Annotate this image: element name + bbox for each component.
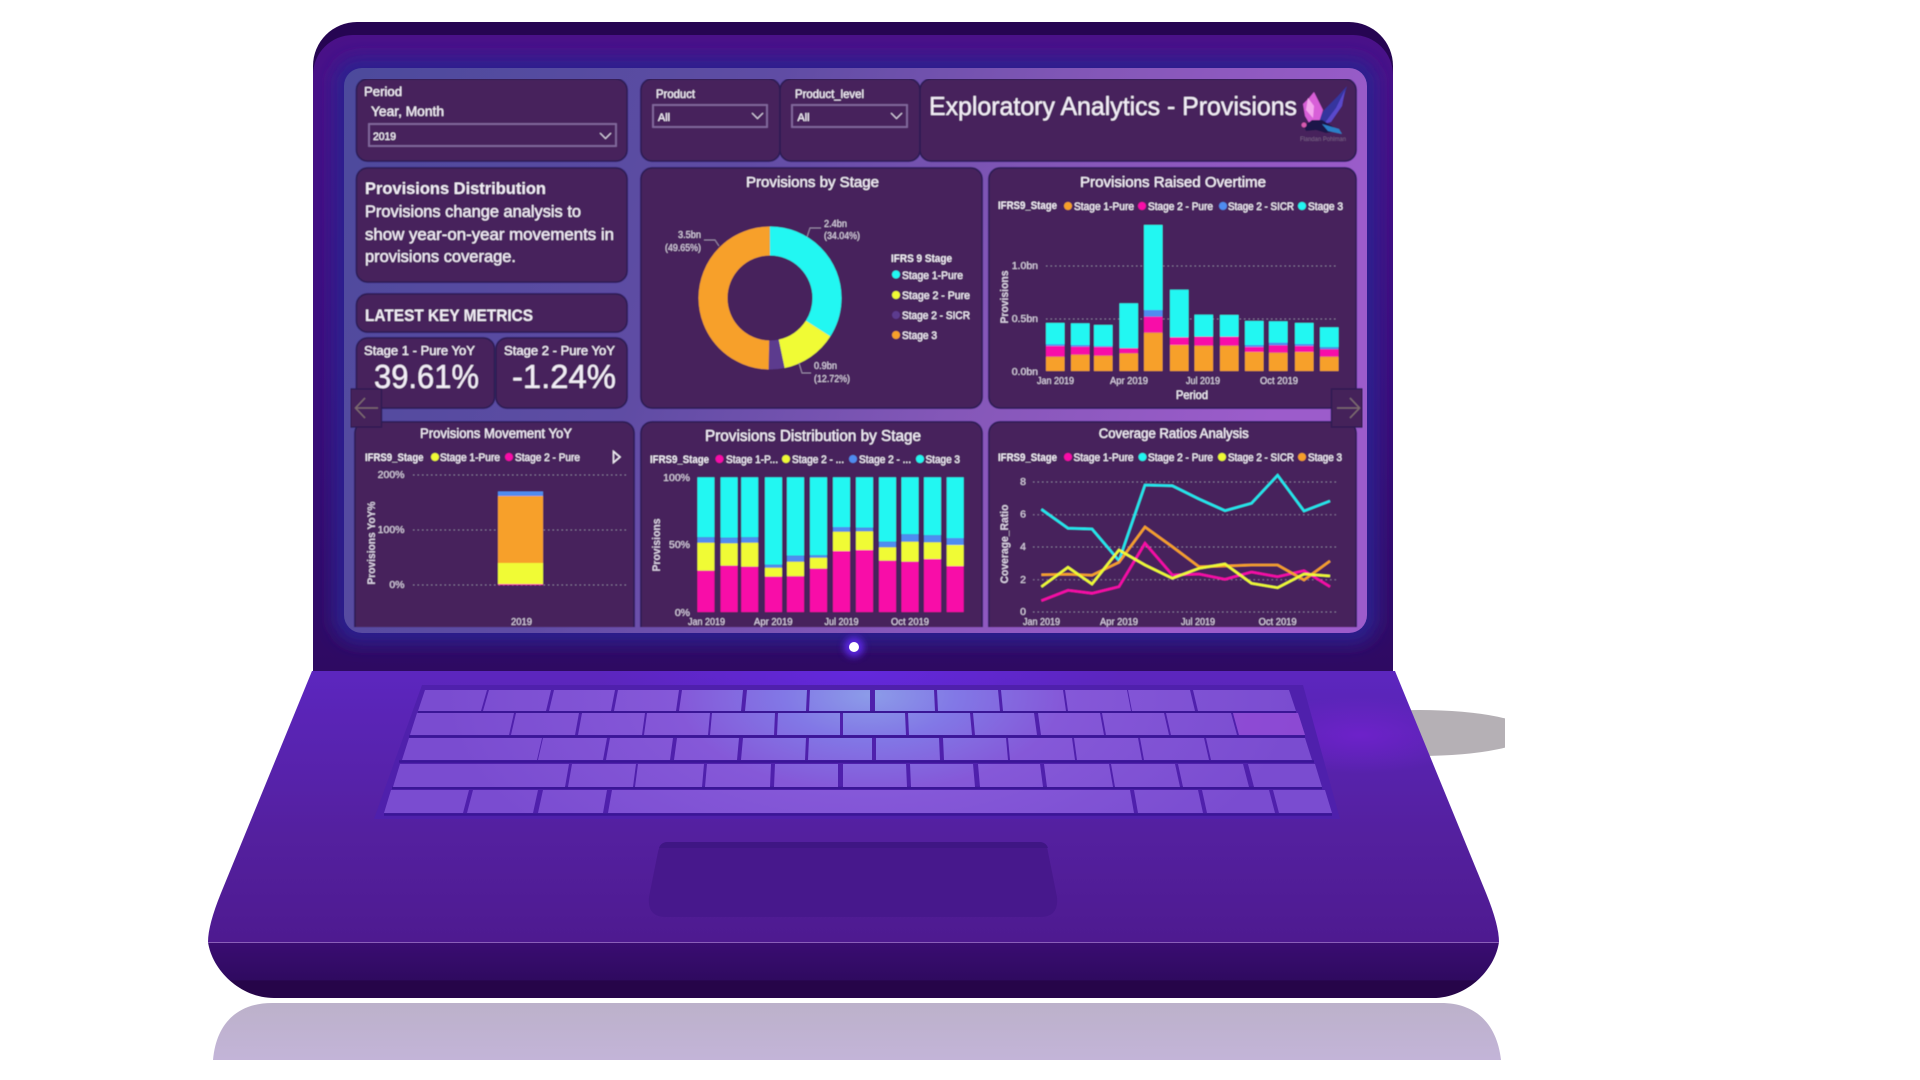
stacked bar chart: Period <box>1176 388 1208 402</box>
laptop base <box>208 671 1499 998</box>
laptop lid <box>313 22 1393 672</box>
panel: provisions by stage donut <box>641 168 982 408</box>
legend: Stage 3 <box>1308 201 1343 213</box>
table shadow behind laptop <box>1411 710 1505 756</box>
legend: Stage 1-Pure <box>440 452 500 464</box>
legend: IFRS9_Stage <box>998 452 1057 464</box>
panel: product level slicer: Product_level <box>795 87 864 101</box>
power button light <box>844 637 864 657</box>
donut legend: Stage 3 <box>902 330 937 342</box>
legend: Stage 2 - SICR <box>1228 452 1294 464</box>
dashboard screen <box>350 79 1362 652</box>
base deck <box>208 671 1499 942</box>
legend: Stage 1-Pure <box>1074 452 1134 464</box>
panel: stage 2 metric card <box>496 338 627 408</box>
stacked bar chart: Oct 2019 <box>1260 375 1298 387</box>
legend: Stage 3 <box>1308 452 1342 464</box>
stacked bar chart: 2019 <box>511 616 532 628</box>
stacked bar chart: 0.5bn <box>1012 313 1038 325</box>
donut legend: IFRS 9 Stage <box>891 253 952 265</box>
legend <box>650 454 960 466</box>
100% stacked bar chart: Jan 2019 <box>688 616 725 628</box>
line chart: 8 <box>1020 476 1026 488</box>
panel: product slicer <box>641 79 780 161</box>
panel: dashboard title <box>920 79 1356 161</box>
stacked bar chart <box>366 469 627 628</box>
line chart: 0 <box>1020 606 1026 618</box>
panel: period slicer: Year, Month <box>371 103 444 119</box>
donut data labels: (49.65%) <box>665 242 701 254</box>
100% stacked bar chart: 100% <box>663 472 690 484</box>
stacked bar chart: 100% <box>378 524 404 536</box>
panel: coverage ratios analysis: Coverage Ratios Analysis <box>1099 426 1249 441</box>
stacked bar chart: 0% <box>389 579 404 591</box>
panel: product slicer: All <box>658 112 670 124</box>
panel: provisions raised overtime <box>989 168 1356 408</box>
panel: provisions by stage donut: Provisions by Stage <box>746 174 879 191</box>
legend: Stage 2 - Pure <box>1148 452 1213 464</box>
legend: Stage 2 - Pure <box>515 452 580 464</box>
donut data labels: (12.72%) <box>814 373 850 385</box>
panel: provisions raised overtime: Provisions Raised Overtime <box>1080 174 1266 191</box>
stacked bar chart: Provisions <box>999 270 1011 324</box>
key rows <box>384 690 1332 813</box>
line chart: 6 <box>1020 508 1026 520</box>
donut legend: Stage 1-Pure <box>902 270 963 282</box>
icon: bird logo <box>1300 86 1347 143</box>
line chart: Oct 2019 <box>1259 616 1297 628</box>
stacked bar chart: Apr 2019 <box>1110 375 1148 387</box>
panel: product level slicer <box>780 79 920 161</box>
legend: Stage 2 - ... <box>859 454 911 466</box>
legend: IFRS9_Stage <box>365 452 424 464</box>
icon: bird logo: Flandan Pohlman <box>1300 136 1346 143</box>
panel: provisions movement yoy <box>355 422 634 652</box>
donut legend: Stage 2 - SICR <box>902 310 970 322</box>
legend: Stage 3 <box>926 454 960 466</box>
donut data labels: 3.5bn <box>678 229 701 241</box>
panel: latest key metrics heading: LATEST KEY METRICS <box>365 306 533 325</box>
legend: IFRS9_Stage <box>650 454 709 466</box>
stacked bar chart: 0.0bn <box>1012 366 1038 378</box>
line chart: Apr 2019 <box>1100 616 1138 628</box>
panel: provisions distribution text: provisions coverage. <box>365 247 516 266</box>
line chart: Jan 2019 <box>1023 616 1060 628</box>
line chart: Jul 2019 <box>1181 616 1215 628</box>
donut legend <box>891 253 970 342</box>
screen bezel <box>344 68 1367 633</box>
stacked bar chart: 200% <box>378 469 404 481</box>
panel: period slicer: 2019 <box>373 131 396 143</box>
panel: provisions distribution text <box>356 168 627 282</box>
panel: period slicer: Period <box>364 84 402 99</box>
stacked bar chart <box>999 225 1338 402</box>
stacked bar chart: Jul 2019 <box>1186 375 1220 387</box>
donut data labels: 2.4bn <box>824 218 847 230</box>
arrow: previous page <box>350 389 382 427</box>
highlighted key tint <box>1233 713 1305 735</box>
donut data labels <box>665 218 860 385</box>
line chart: 4 <box>1020 541 1026 553</box>
legend: IFRS9_Stage <box>998 200 1057 212</box>
base front edge <box>208 942 1499 998</box>
line chart: Coverage_Ratio <box>999 504 1011 584</box>
legend <box>365 452 620 464</box>
stacked bar chart: 1.0bn <box>1012 260 1038 272</box>
keyboard well <box>374 685 1340 819</box>
100% stacked bar chart <box>651 472 964 628</box>
panel: provisions distribution by stage: Provisions Distribution by Stage <box>705 428 921 445</box>
100% stacked bar chart: Apr 2019 <box>754 616 793 628</box>
line chart: 2 <box>1020 574 1026 586</box>
arrow: next page <box>1332 389 1362 427</box>
panel: provisions distribution by stage <box>641 422 982 652</box>
stacked bar chart: Provisions YoY% <box>366 501 378 584</box>
legend: Stage 2 - ... <box>792 454 844 466</box>
legend: Stage 2 - SICR <box>1228 201 1294 213</box>
panel: latest key metrics heading <box>356 294 627 332</box>
100% stacked bar chart: Provisions <box>651 518 663 572</box>
panel: stage 1 metric card: 39.61% <box>374 358 479 395</box>
stacked bar chart: Jan 2019 <box>1037 375 1074 387</box>
legend <box>998 452 1342 464</box>
panel: stage 1 metric card: Stage 1 - Pure YoY <box>364 343 475 358</box>
panel: period slicer <box>356 79 627 161</box>
panel: provisions movement yoy: Provisions Movement YoY <box>420 426 572 441</box>
laptop reflection <box>213 1003 1501 1060</box>
legend <box>998 200 1343 213</box>
panel: coverage ratios analysis <box>989 422 1356 652</box>
panel: product slicer: Product <box>656 87 696 101</box>
donut data labels: 0.9bn <box>814 360 837 372</box>
panel: provisions distribution text: show year-on-year movements in <box>365 225 614 244</box>
panel: product level slicer: All <box>798 112 810 124</box>
100% stacked bar chart: Jul 2019 <box>824 616 859 628</box>
100% stacked bar chart: 0% <box>675 607 690 619</box>
legend: Stage 2 - Pure <box>1148 201 1213 213</box>
trackpad <box>649 842 1057 917</box>
panel: stage 2 metric card: Stage 2 - Pure YoY <box>504 343 615 358</box>
legend: Stage 1-Pure <box>1074 201 1134 213</box>
panel: stage 1 metric card <box>356 338 494 408</box>
keyboard <box>374 685 1340 819</box>
donut data labels: (34.04%) <box>824 230 860 242</box>
100% stacked bar chart: Oct 2019 <box>891 616 929 628</box>
panel: provisions distribution text: Provisions change analysis to <box>365 202 581 221</box>
panel: stage 2 metric card: -1.24% <box>512 358 616 395</box>
line chart <box>999 475 1339 628</box>
donut legend: Stage 2 - Pure <box>902 290 970 302</box>
lid body <box>313 22 1393 672</box>
panel: dashboard title: Exploratory Analytics - Provisions <box>929 91 1297 121</box>
panel: provisions distribution text: Provisions Distribution <box>365 179 546 198</box>
donut chart <box>713 241 827 355</box>
100% stacked bar chart: 50% <box>669 539 690 551</box>
legend: Stage 1-P... <box>726 454 778 466</box>
